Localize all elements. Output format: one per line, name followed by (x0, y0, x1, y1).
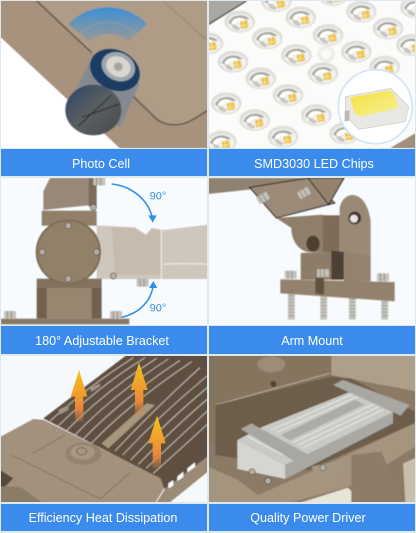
caption bar: arm mount (209, 326, 415, 354)
photo: LED power driver in housing (209, 356, 415, 502)
arrow: upper 90 degree rotation (112, 184, 157, 223)
caption bar: SMD3030 LED chips: SMD3030 LED Chips (254, 157, 374, 171)
label: upper angle: 90° (150, 190, 166, 202)
icon: heat arrow right (148, 416, 166, 468)
photo: bracket side view (1, 178, 207, 325)
panel: photo cell (0, 0, 210, 176)
panel: 180 degree adjustable bracket (0, 177, 210, 354)
label: lower angle: 90° (150, 302, 166, 314)
caption bar: 180 degree adjustable bracket: 180° Adjustable Bracket (35, 334, 169, 348)
icon: magnified LED chip inset (338, 70, 412, 144)
caption bar: efficiency heat dissipation: Efficiency Heat Dissipation (29, 511, 177, 525)
panel: SMD3030 LED chips (193, 0, 416, 176)
caption bar: SMD3030 LED chips (209, 149, 415, 176)
photo: arm mount assembly (209, 178, 415, 325)
caption bar: photo cell: Photo Cell (72, 157, 130, 171)
caption bar: quality power driver (209, 504, 415, 531)
panel: efficiency heat dissipation (0, 355, 210, 531)
caption bar: 180 degree adjustable bracket (1, 326, 207, 354)
caption bar: efficiency heat dissipation (1, 504, 207, 531)
photo: LED lens array with chip inset (209, 1, 415, 148)
panel: arm mount (208, 178, 416, 354)
caption bar: arm mount: Arm Mount (281, 334, 343, 348)
panel: quality power driver (208, 355, 416, 531)
icon: heat arrow middle (131, 362, 148, 415)
caption bar: quality power driver: Quality Power Driver (250, 511, 366, 525)
photo: photo cell sensor on housing (1, 1, 207, 148)
photo: heat sink fins with cover (1, 356, 207, 502)
arrow: lower 90 degree rotation (122, 281, 157, 317)
caption bar: photo cell (1, 149, 207, 176)
icon: heat arrow left (71, 370, 87, 422)
